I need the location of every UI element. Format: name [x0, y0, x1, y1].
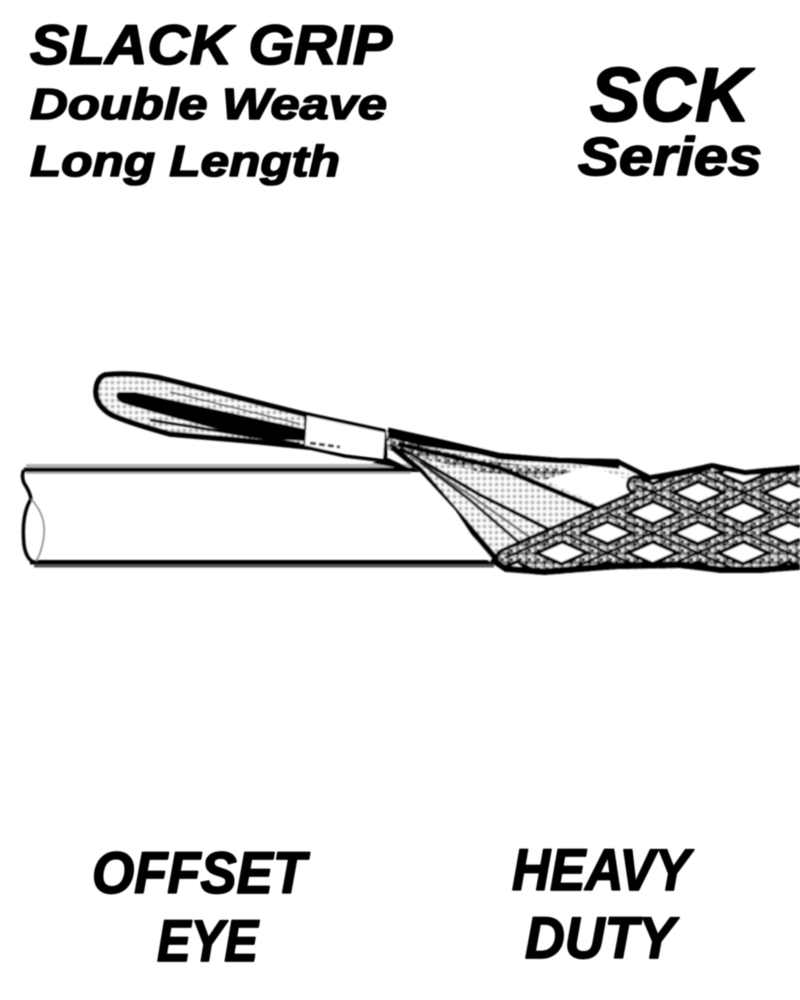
- label: offset eye: OFFSET: [92, 841, 310, 906]
- fan of strands from eye: [388, 434, 640, 565]
- label: heavy duty: HEAVY: [512, 838, 695, 903]
- illustration: cable with offset eye grip: [20, 370, 800, 576]
- dark strand centres: [504, 464, 800, 575]
- cable: [22, 464, 500, 568]
- woven mesh grip: [384, 426, 800, 576]
- subtitle: long length: Long Length: [30, 137, 340, 186]
- offset eye loop: [96, 374, 307, 447]
- black strand edges: [494, 463, 800, 576]
- outer edges: [388, 428, 800, 476]
- series label: Series: [578, 127, 762, 187]
- label: offset eye: EYE: [157, 909, 260, 974]
- label: heavy duty: DUTY: [525, 906, 680, 971]
- subtitle: double weave: Double Weave: [30, 80, 387, 129]
- ferrule: [305, 414, 418, 472]
- label: heavy duty: [512, 838, 695, 971]
- title: slack grip: SLACK GRIP: [30, 13, 393, 76]
- series code: SCK: SCK: [590, 53, 755, 138]
- checkered strand fill: [497, 462, 800, 576]
- label: offset eye: [92, 841, 310, 974]
- white diamond opening: [546, 466, 629, 504]
